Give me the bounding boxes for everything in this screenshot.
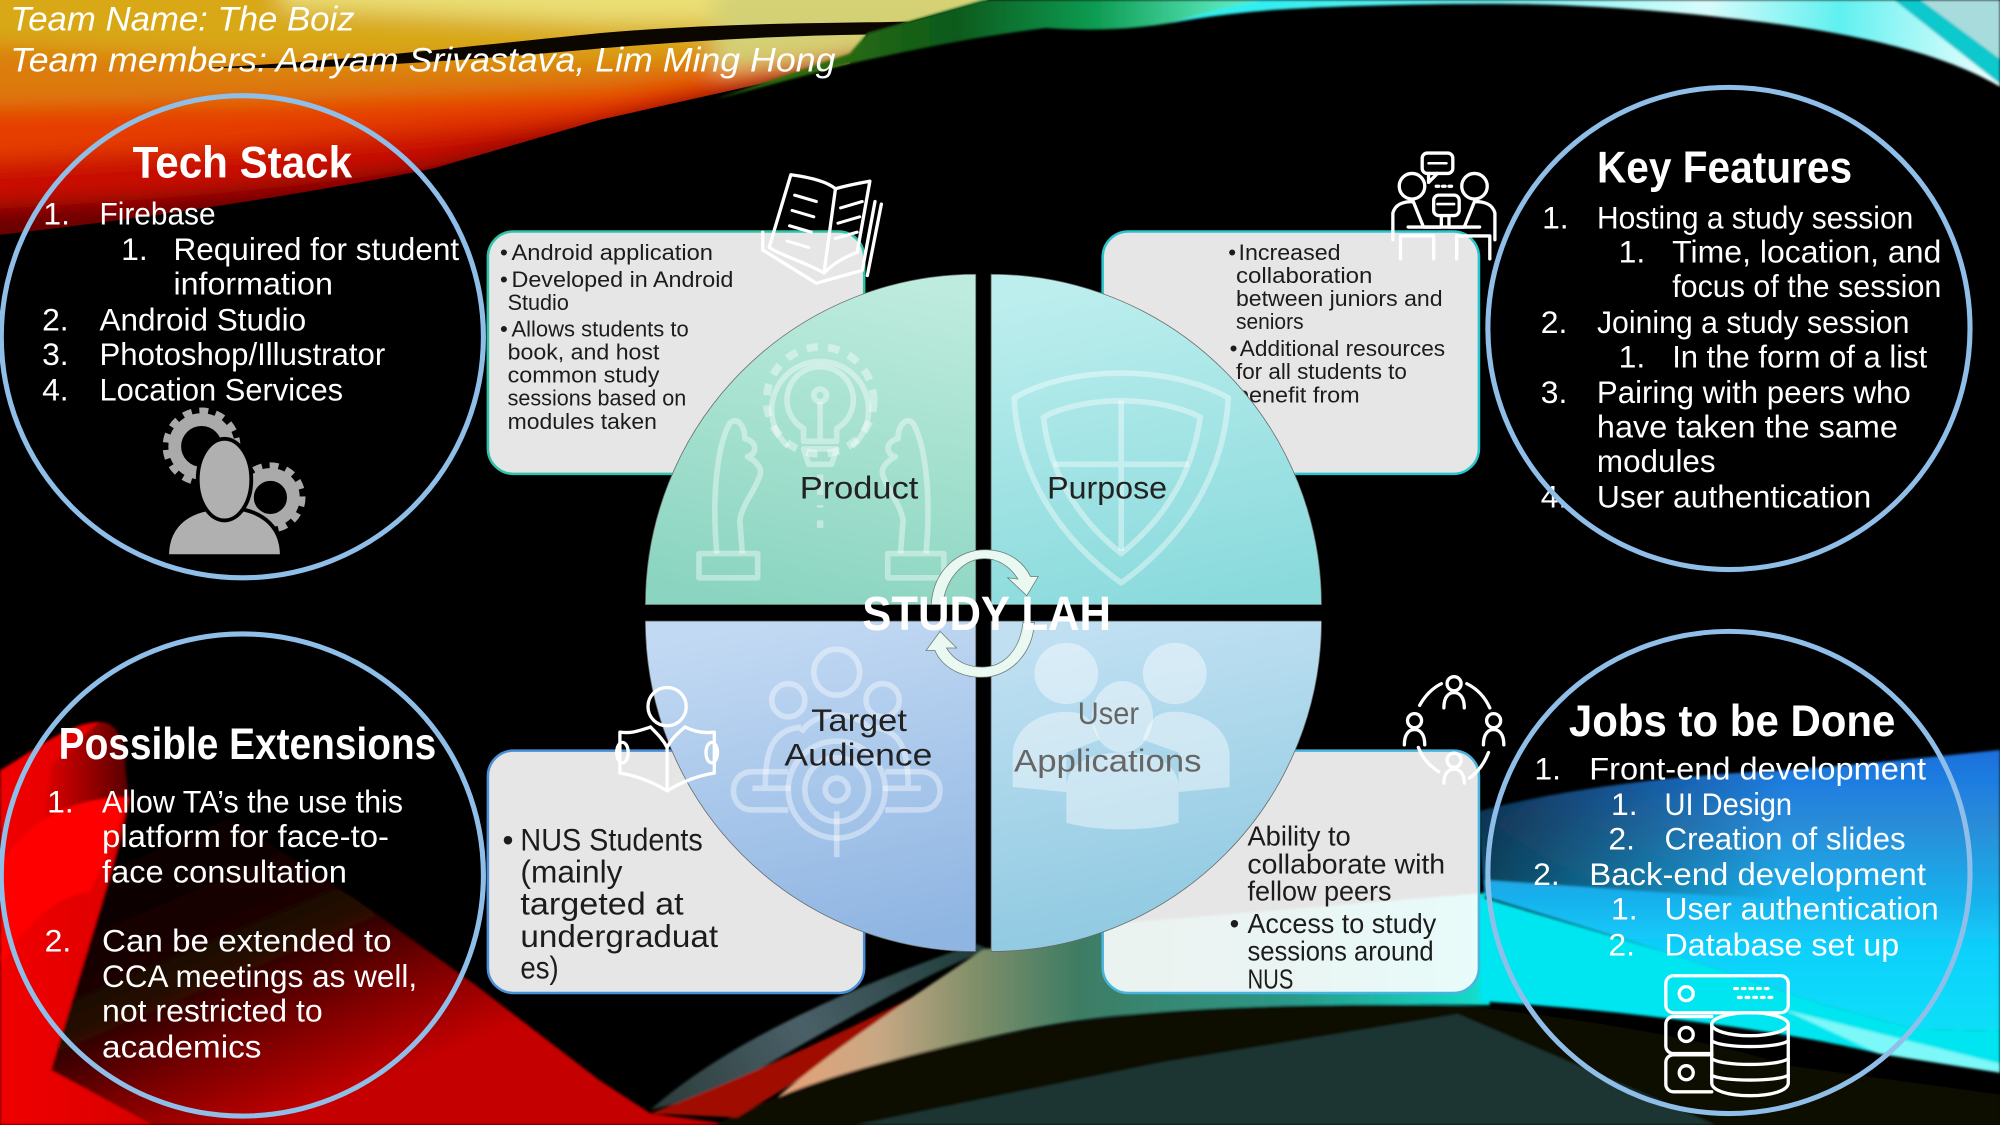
list: possible extensions items: 1.	[47, 783, 74, 819]
list: key features items: 1.	[1619, 234, 1645, 270]
heading: key features: Key Features	[1597, 143, 1852, 192]
list: jobs items: User authentication	[1665, 891, 1939, 927]
list: tech stack items: information	[173, 266, 333, 302]
quadrant: target audience	[645, 621, 976, 952]
icon: people meeting at table	[1393, 153, 1495, 259]
list: possible extensions items: 2.	[45, 923, 71, 959]
list: key features items	[1541, 199, 1941, 515]
list: jobs items: 2.	[1608, 926, 1635, 962]
text: user applications bullets: collaborate with	[1247, 849, 1445, 880]
label: user applications: User	[1078, 695, 1139, 731]
label: product: Product	[800, 470, 919, 506]
text: purpose bullets: •	[1228, 240, 1236, 265]
text: product bullets: Developed in Android	[511, 267, 733, 292]
text: user applications bullets: Ability to	[1247, 821, 1351, 852]
panel: purpose description	[1103, 232, 1479, 474]
label: user applications	[1014, 695, 1202, 779]
text: purpose bullets: collaboration	[1236, 263, 1372, 288]
list: jobs items: Database set up	[1665, 926, 1899, 962]
title: study lah: STUDY LAH	[862, 587, 1111, 641]
icon: hands with lightbulb gear	[699, 347, 944, 578]
icon: student reading	[617, 688, 717, 791]
text: product bullets: book, and host	[508, 340, 660, 365]
panel: target audience description	[488, 751, 864, 993]
list: key features items: 3.	[1541, 374, 1567, 410]
label: target audience	[784, 702, 932, 772]
list: possible extensions items: not restricted to	[102, 993, 323, 1029]
text: user applications bullets: fellow peers	[1247, 876, 1392, 907]
text: target audience bullets: (mainly	[520, 855, 623, 890]
list: jobs items: UI Design	[1665, 786, 1792, 822]
quadrant: user applications	[991, 621, 1321, 952]
text: product bullets: •	[500, 267, 508, 292]
text: user applications bullets	[1230, 821, 1445, 995]
text: target audience bullets: NUS Students	[520, 823, 703, 858]
text: product bullets: Allows students to	[511, 317, 689, 342]
list: key features items: Joining a study session	[1597, 304, 1909, 340]
panel: possible extensions	[1, 634, 483, 1116]
list: possible extensions items: CCA meetings as well,	[102, 958, 417, 994]
list: jobs items: 1.	[1611, 786, 1638, 822]
text: product bullets: common study	[508, 363, 660, 388]
list: key features items: Time, location, and	[1672, 234, 1941, 270]
list: jobs items	[1533, 750, 1939, 962]
text: target audience bullets: targeted at	[520, 887, 684, 922]
list: jobs items: 1.	[1611, 891, 1638, 927]
list: possible extensions items: Allow TA’s the use this	[102, 783, 403, 819]
heading: jobs to be done: Jobs to be Done	[1569, 697, 1895, 746]
heading: tech stack: Tech Stack	[133, 138, 352, 187]
text: user applications bullets: Access to study	[1247, 908, 1437, 939]
list: possible extensions items: platform for face-to-	[102, 818, 389, 854]
header: team details	[10, 1, 835, 79]
list: tech stack items: Required for student	[173, 231, 459, 267]
label: target audience: Target	[811, 702, 907, 738]
list: jobs items: Back-end development	[1589, 856, 1926, 892]
icon: open book	[763, 175, 881, 283]
list: key features items: have taken the same	[1597, 408, 1898, 444]
icon: shield	[1014, 373, 1228, 583]
list: key features items: Hosting a study session	[1597, 199, 1913, 235]
list: tech stack items: Location Services	[99, 372, 343, 408]
icon: three users	[1013, 643, 1230, 829]
header: team details: Team members: Aaryam Srivastava, Lim Ming Hong	[10, 41, 835, 79]
text: purpose bullets: •	[1230, 336, 1237, 361]
list: tech stack items: 1.	[43, 195, 70, 231]
list: possible extensions items: face consultation	[102, 854, 347, 890]
list: tech stack items: Firebase	[99, 195, 216, 231]
icon: database server	[1666, 976, 1788, 1096]
text: target audience bullets: •	[503, 823, 514, 858]
header: team details: Team Name: The Boiz	[10, 1, 355, 39]
text: purpose bullets: Increased	[1239, 240, 1341, 265]
quadrant: purpose	[991, 274, 1321, 605]
list: possible extensions items: Can be extended to	[102, 923, 392, 959]
list: jobs items: Creation of slides	[1665, 820, 1906, 856]
list: jobs items: 1.	[1534, 750, 1561, 786]
list: key features items: 1.	[1542, 199, 1569, 235]
icon: circle of people	[1404, 677, 1504, 783]
list: key features items: Pairing with peers who	[1597, 374, 1911, 410]
label: target audience: Audience	[784, 736, 932, 772]
text: purpose bullets: for all students to	[1236, 359, 1407, 384]
list: key features items: 1.	[1619, 338, 1645, 374]
text: user applications bullets: sessions around	[1247, 935, 1434, 966]
quadrant: product	[645, 274, 976, 605]
text: target audience bullets: undergraduat	[520, 919, 718, 954]
list: key features items: modules	[1597, 443, 1716, 479]
list: key features items: User authentication	[1597, 479, 1871, 515]
list: tech stack items: 2.	[42, 301, 69, 337]
text: purpose bullets: Additional resources	[1240, 336, 1445, 361]
panel: product description	[488, 232, 864, 474]
text: target audience bullets	[503, 823, 718, 985]
text: target audience bullets: es)	[520, 950, 559, 985]
list: possible extensions items	[45, 784, 417, 1064]
panel: tech stack	[1, 96, 483, 578]
text: product bullets: Android application	[511, 240, 713, 265]
list: tech stack items: Photoshop/Illustrator	[99, 336, 386, 372]
text: user applications bullets: •	[1230, 908, 1239, 939]
text: user applications bullets: NUS	[1247, 964, 1293, 995]
icon: audience target	[733, 649, 940, 857]
heading: possible extensions: Possible Extensions	[59, 720, 436, 769]
list: jobs items: 2.	[1533, 856, 1560, 892]
text: product bullets: Studio	[508, 290, 569, 315]
panel: key features	[1488, 87, 1970, 570]
panel: user applications description	[1103, 751, 1479, 995]
text: product bullets: •	[500, 240, 508, 265]
label: purpose: Purpose	[1047, 470, 1167, 506]
list: tech stack items: Android Studio	[99, 301, 306, 337]
list: key features items: focus of the session	[1672, 268, 1941, 304]
list: key features items: 4.	[1541, 479, 1567, 515]
list: jobs items: 2.	[1608, 820, 1635, 856]
text: product bullets: sessions based on	[508, 386, 686, 411]
label: user applications: Applications	[1014, 743, 1202, 779]
text: product bullets: modules taken	[508, 409, 657, 434]
text: purpose bullets: benefit from	[1236, 382, 1360, 407]
list: possible extensions items: academics	[102, 1028, 261, 1064]
text: purpose bullets	[1228, 240, 1445, 407]
list: key features items: 2.	[1541, 304, 1567, 340]
panel: jobs to be done	[1488, 631, 1970, 1114]
list: tech stack items	[42, 195, 459, 408]
list: tech stack items: 3.	[42, 336, 69, 372]
text: product bullets: •	[500, 317, 508, 342]
text: product bullets	[500, 240, 733, 434]
icon: person with gears	[166, 411, 302, 556]
text: purpose bullets: seniors	[1236, 309, 1304, 334]
list: tech stack items: 1.	[121, 231, 148, 267]
list: key features items: In the form of a list	[1672, 338, 1927, 374]
icon: cycle arrows	[926, 550, 1038, 677]
list: jobs items: Front-end development	[1589, 750, 1926, 786]
list: tech stack items: 4.	[42, 372, 69, 408]
text: purpose bullets: between juniors and	[1236, 286, 1443, 311]
